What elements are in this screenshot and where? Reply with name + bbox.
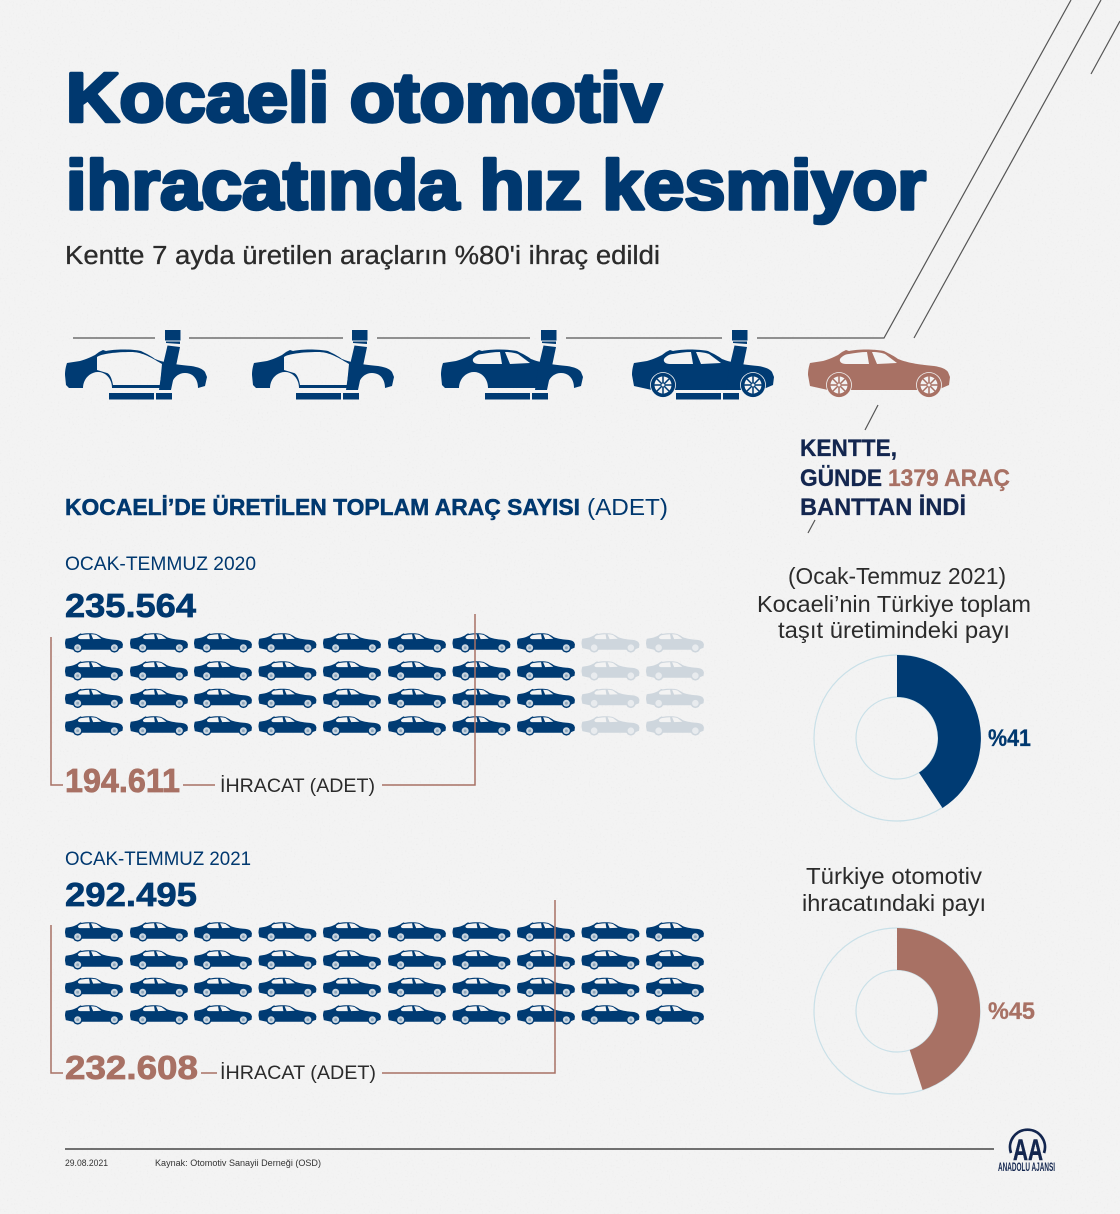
total 2020: 235.564 (65, 587, 197, 624)
export value 2020: 194.611 (65, 763, 180, 800)
title: Kocaeli otomotiv (66, 58, 662, 136)
logo: Anadolu Ajansı: ANADOLU AJANSI (998, 1160, 1055, 1174)
callout: daily production: BANTTAN İNDİ (800, 494, 966, 521)
donut heading 2: Türkiye otomotiv (806, 863, 983, 889)
logo: Anadolu Ajansı (998, 1130, 1055, 1174)
section heading: (ADET) (587, 494, 668, 520)
donut chart 41 percent (814, 655, 981, 821)
car grid 2020 (65, 633, 704, 736)
car grid 2021 (65, 922, 704, 1025)
callout: daily production (800, 435, 1010, 521)
donut heading 1 (757, 563, 1031, 643)
panel: 2020 production (51, 554, 704, 800)
callout: daily production: KENTTE, (800, 435, 897, 462)
donut heading 1: Kocaeli’nin Türkiye toplam (757, 591, 1031, 617)
footer (65, 1149, 994, 1168)
car stage 3 (441, 330, 583, 400)
export bracket 2020 (51, 614, 475, 785)
export label 2020: İHRACAT (ADET) (220, 776, 375, 797)
finished car (808, 350, 950, 398)
title: ihracatında hız kesmiyor (66, 146, 926, 224)
panel: share of Turkish automotive exports (802, 863, 1035, 1094)
donut heading 1: taşıt üretimindeki payı (778, 617, 1010, 643)
car stage 2 (252, 330, 394, 400)
source: Kaynak: Otomotiv Sanayii Derneği (OSD) (155, 1158, 321, 1168)
title (66, 58, 926, 224)
period label 2020: OCAK-TEMMUZ 2020 (65, 554, 256, 575)
subtitle: Kentte 7 ayda üretilen araçların %80'i ihraç edildi (65, 242, 660, 270)
donut value 41: %41 (988, 725, 1031, 752)
panel: 2021 production (51, 849, 704, 1087)
period label 2021: OCAK-TEMMUZ 2021 (65, 849, 251, 870)
date: 29.08.2021 (65, 1158, 108, 1168)
donut heading 2 (802, 863, 986, 916)
callout: daily production: GÜNDE (800, 465, 882, 492)
car stage 1 (65, 330, 207, 400)
donut heading 1: (Ocak-Temmuz 2021) (788, 563, 1006, 589)
panel: share of Turkish vehicle production (757, 563, 1031, 821)
decorative diagonal lines and assembly line (73, 0, 1120, 533)
export label 2021: İHRACAT (ADET) (220, 1063, 376, 1084)
section heading: KOCAELİ’DE ÜRETİLEN TOPLAM ARAÇ SAYISI (65, 494, 580, 520)
donut heading 2: ihracatındaki payı (802, 890, 986, 916)
production stages illustration (65, 330, 950, 400)
export value 2021: 232.608 (65, 1050, 198, 1087)
logo: Anadolu Ajansı: AA (1013, 1134, 1043, 1167)
donut chart 45 percent (814, 928, 980, 1094)
export bracket 2021 (51, 900, 555, 1073)
car stage 4 (632, 330, 774, 400)
total 2021: 292.495 (65, 876, 197, 913)
donut value 45: %45 (988, 998, 1035, 1025)
callout: daily production: 1379 ARAÇ (888, 465, 1010, 492)
